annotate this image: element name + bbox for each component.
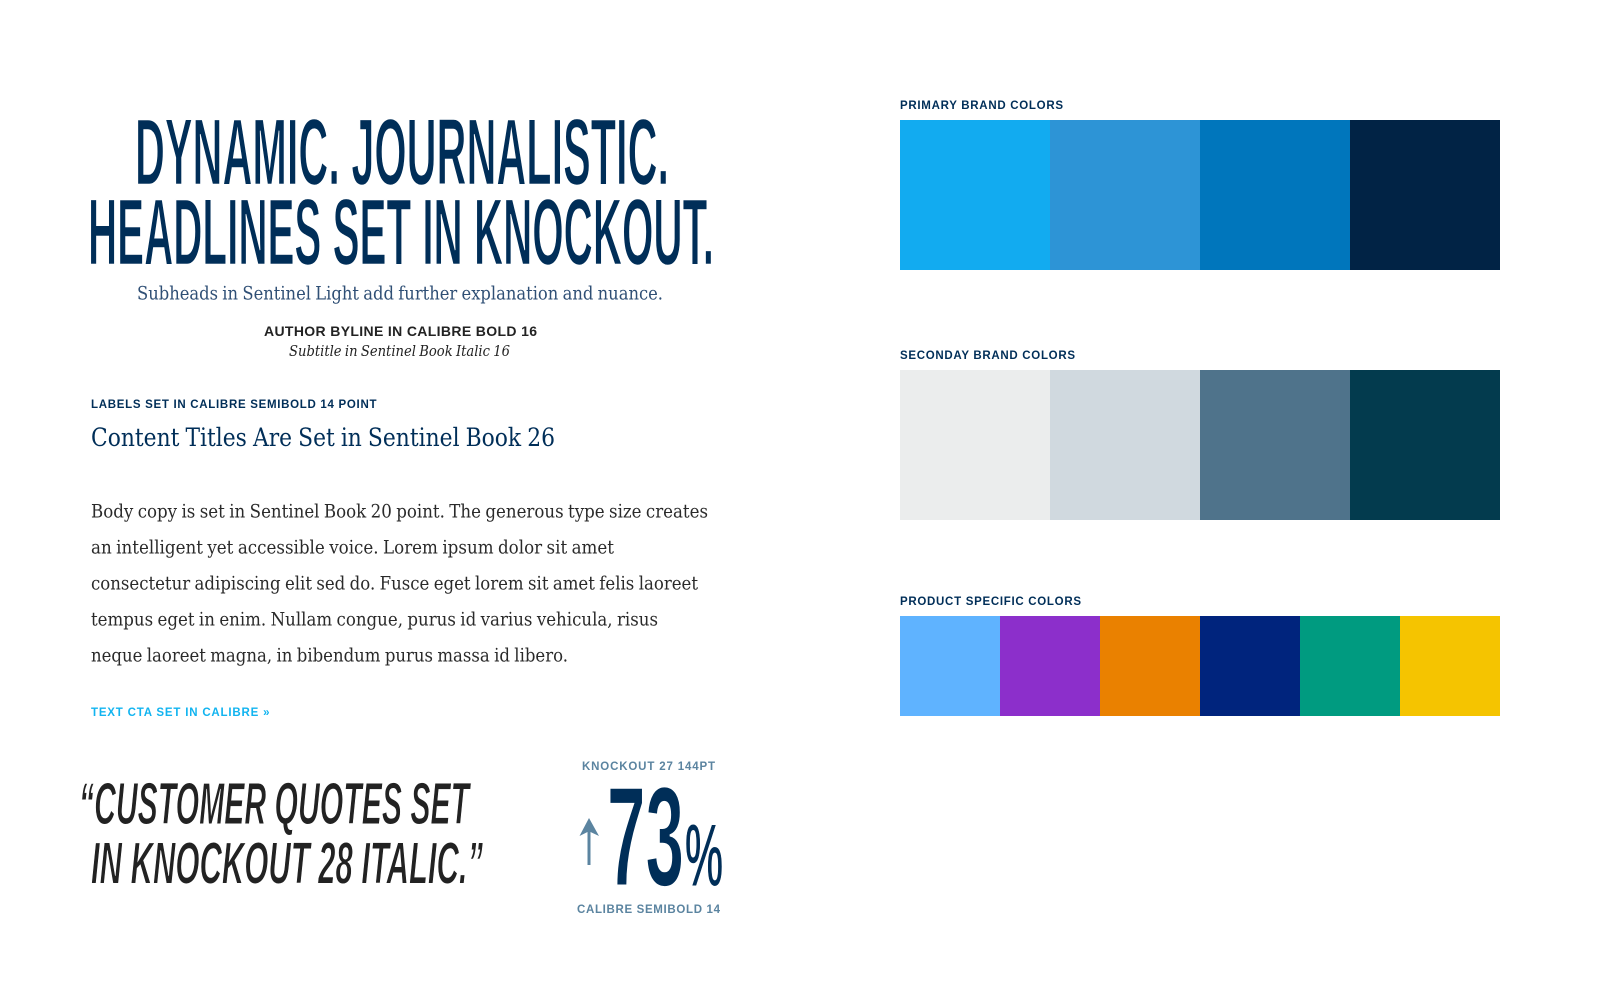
swatches xyxy=(900,120,1500,270)
stat callout: 73 xyxy=(607,758,684,916)
panel: product specific colors xyxy=(900,596,1500,716)
customer quote xyxy=(79,771,483,896)
icon: up arrow xyxy=(580,818,599,865)
customer quote: IN KNOCKOUT 28 ITALIC.” xyxy=(91,830,483,896)
body copy: Body copy is set in Sentinel Book 20 point. The generous type size creates xyxy=(91,500,708,522)
subtitle: Subtitle in Sentinel Book Italic 16 xyxy=(289,342,510,360)
headline xyxy=(88,100,714,286)
heading: SECONDAY BRAND COLORS xyxy=(900,350,1075,362)
body copy: consectetur adipiscing elit sed do. Fusce eget lorem sit amet felis laoreet xyxy=(91,572,698,594)
heading: PRODUCT SPECIFIC COLORS xyxy=(900,596,1081,608)
text: HEADLINES SET IN KNOCKOUT. xyxy=(88,180,714,286)
subhead: Subheads in Sentinel Light add further explanation and nuance. xyxy=(137,284,663,304)
text call to action: TEXT CTA SET IN CALIBRE » xyxy=(91,707,270,719)
text: DYNAMIC. JOURNALISTIC. xyxy=(135,100,669,206)
panel: typography specimens xyxy=(79,100,723,916)
author byline: AUTHOR BYLINE IN CALIBRE BOLD 16 xyxy=(264,323,537,339)
text: % xyxy=(685,808,723,904)
customer quote: “CUSTOMER QUOTES SET xyxy=(79,771,472,837)
panel: secondary brand colors xyxy=(900,350,1500,520)
swatches xyxy=(900,370,1500,520)
body copy: neque laoreet magna, in bibendum purus massa id libero. xyxy=(91,644,568,666)
heading: PRIMARY BRAND COLORS xyxy=(900,100,1063,112)
body copy: tempus eget in enim. Nullam congue, purus id varius vehicula, risus xyxy=(91,608,658,630)
stat callout xyxy=(577,758,723,916)
swatches xyxy=(900,616,1500,716)
content title: Content Titles Are Set in Sentinel Book 26 xyxy=(91,423,555,452)
body copy xyxy=(91,500,708,666)
panel: primary brand colors xyxy=(900,100,1500,270)
body copy: an intelligent yet accessible voice. Lorem ipsum dolor sit amet xyxy=(91,536,614,558)
label: LABELS SET IN CALIBRE SEMIBOLD 14 POINT xyxy=(91,399,376,411)
stat bottom label: CALIBRE SEMIBOLD 14 xyxy=(577,904,721,916)
stat top label: KNOCKOUT 27 144PT xyxy=(582,761,715,773)
